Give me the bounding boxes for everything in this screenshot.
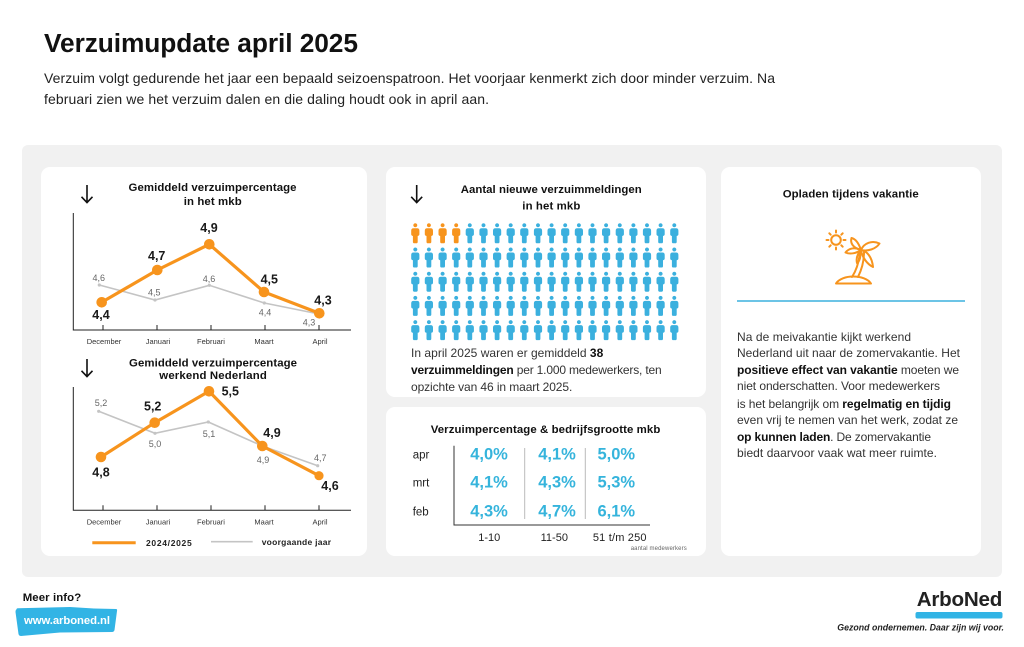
heading: Opladen tijdens vakantie: [783, 188, 919, 200]
heading: [461, 184, 642, 212]
table values: [470, 446, 635, 521]
chart: werkend Nederland: 5,5: [222, 384, 239, 398]
footer: meer info: www.arboned.nl: [23, 615, 110, 627]
chart: mkb: 4,6: [203, 274, 215, 284]
table values: 6,1%: [597, 503, 635, 521]
chart: mkb: December: [87, 337, 122, 346]
heading: chart 2: [129, 358, 297, 382]
panel: line charts: [41, 167, 367, 556]
icon: arrow down chart 1: [82, 185, 92, 203]
text block: op kunnen laden. De zomervakantie: [737, 430, 931, 444]
legend: [92, 537, 332, 548]
heading: chart 1: Gemiddeld verzuimpercentage: [128, 182, 296, 194]
column labels: aantal medewerkers: [631, 546, 687, 552]
row labels: apr: [413, 450, 429, 462]
chart: mkb: 4,3: [303, 318, 315, 328]
text block: even vrij te nemen van het werk, zodat ze: [737, 413, 958, 427]
table values: 4,3%: [538, 474, 576, 492]
chart: mkb: 4,5: [261, 272, 278, 286]
text block: positieve effect van vakantie moeten we: [737, 363, 959, 377]
column labels: 11-50: [541, 532, 568, 544]
column labels: 1-10: [478, 532, 500, 544]
icon: arrow down: [411, 185, 422, 203]
panel: bedrijfsgrootte: [386, 407, 706, 556]
text block: verzuimmeldingen per 1.000 medewerkers, ten: [411, 363, 662, 377]
logo: ArboNed: [837, 588, 1004, 633]
heading: chart 1: in het mkb: [184, 196, 242, 208]
chart: werkend Nederland: 4,9: [257, 455, 269, 465]
text block: Nederland uit naar de zomervakantie. Het: [737, 346, 961, 360]
table values: 4,0%: [470, 446, 508, 464]
logo: ArboNed: ArboNed: [917, 588, 1002, 611]
text block: is het belangrijk om regelmatig en tijdig: [737, 397, 951, 411]
pictogram: 100 people, 4 orange: [411, 223, 678, 340]
footer: meer info: Meer info?: [23, 592, 81, 604]
table values: 5,0%: [597, 446, 635, 464]
intro text: februari zien we het verzuim dalen en die daling houdt ook in april aan.: [44, 91, 489, 107]
chart: werkend Nederland: Januari: [146, 518, 171, 526]
legend: voorgaande jaar: [262, 537, 332, 547]
intro text: Verzuim volgt gedurende het jaar een bepaald seizoenspatroon. Het voorjaar kenmerkt zich door minder verzuim. Na: [44, 70, 775, 86]
heading: Verzuimpercentage & bedrijfsgrootte mkb: [431, 424, 660, 436]
table values: 4,7%: [538, 503, 576, 521]
legend: 2024/2025: [146, 538, 192, 548]
table axes: [454, 446, 650, 525]
text block: niet onderschatten. Voor medewerkers: [737, 379, 940, 393]
chart: mkb: Maart: [254, 337, 275, 346]
chart: werkend Nederland: 5,2: [95, 398, 107, 408]
panel: vakantie: [721, 167, 981, 556]
chart: werkend Nederland: 5,0: [149, 439, 161, 449]
heading: chart 1: [128, 182, 296, 208]
column labels: 51 t/m 250: [593, 532, 647, 544]
chart: mkb: 4,4: [259, 308, 271, 318]
icon: sun and palm island: [826, 230, 880, 284]
table values: 4,1%: [538, 446, 576, 464]
row labels: feb: [413, 507, 429, 519]
panel: verzuimmeldingen: [386, 167, 706, 397]
chart: werkend Nederland: December: [87, 518, 122, 526]
heading: chart 2: werkend Nederland: [158, 370, 267, 382]
chart: mkb: Februari: [197, 337, 225, 346]
table values: 4,3%: [470, 503, 508, 521]
chart: mkb: 4,3: [314, 294, 332, 308]
title: Verzuimupdate april 2025: [44, 28, 358, 58]
text block: biedt daarvoor vaak wat meer ruimte.: [737, 446, 937, 460]
heading: Aantal nieuwe verzuimmeldingen: [461, 184, 642, 196]
chart: mkb: Januari: [146, 337, 171, 346]
chart: werkend Nederland: 5,1: [203, 429, 215, 439]
table values: 4,1%: [470, 474, 508, 492]
chart: werkend Nederland: [73, 384, 351, 526]
row labels: mrt: [413, 477, 430, 489]
chart: mkb: 4,7: [148, 249, 165, 263]
heading: chart 2: Gemiddeld verzuimpercentage: [129, 358, 297, 370]
divider: [737, 300, 965, 302]
chart: werkend Nederland: 4,7: [314, 453, 327, 463]
chart: mkb: [73, 213, 351, 346]
chart: mkb: 4,9: [200, 221, 218, 235]
text block: [737, 330, 961, 460]
chart: werkend Nederland: 4,6: [321, 479, 339, 493]
logo: ArboNed: Gezond ondernemen. Daar zijn wij voor.: [837, 623, 1004, 633]
chart: werkend Nederland: 5,2: [144, 400, 161, 414]
intro text: [44, 70, 775, 107]
footer: meer info: [16, 592, 117, 636]
chart: werkend Nederland: Februari: [197, 518, 225, 526]
text block: opzichte van 46 in maart 2025.: [411, 380, 572, 394]
chart: werkend Nederland: Maart: [254, 518, 275, 526]
chart: werkend Nederland: 4,9: [263, 426, 281, 440]
text block: Na de meivakantie kijkt werkend: [737, 330, 911, 344]
panel: background: [22, 145, 1002, 577]
chart: mkb: 4,6: [92, 273, 105, 283]
table values: 5,3%: [597, 474, 635, 492]
icon: arrow down chart 2: [82, 359, 92, 377]
text block: [411, 346, 662, 394]
chart: mkb: April: [312, 337, 328, 346]
row labels: [413, 450, 430, 519]
chart: werkend Nederland: April: [312, 518, 328, 526]
heading: in het mkb: [522, 200, 580, 212]
text block: In april 2025 waren er gemiddeld 38: [411, 346, 604, 360]
chart: mkb: 4,4: [92, 308, 110, 322]
chart: mkb: 4,5: [148, 288, 161, 298]
chart: werkend Nederland: 4,8: [92, 466, 110, 480]
brush label: [16, 607, 117, 636]
column labels: [478, 532, 687, 552]
